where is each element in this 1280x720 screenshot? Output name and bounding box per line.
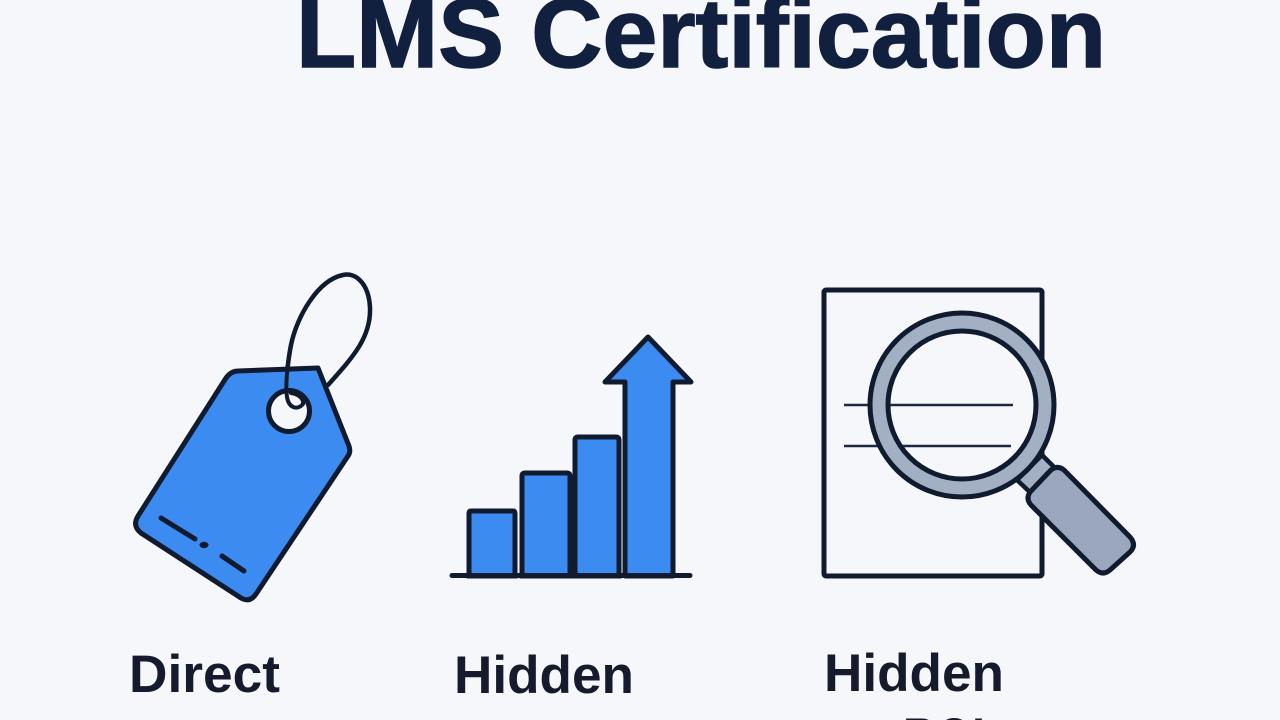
label: hidden: Hidden (454, 646, 634, 705)
tag body (136, 368, 350, 600)
bar 1 (469, 511, 515, 576)
growth arrow (605, 337, 691, 576)
tag string front (286, 345, 303, 408)
bar 2 (522, 473, 570, 576)
magnifier handle (1028, 467, 1134, 573)
tag hole (268, 390, 310, 432)
tag string back loop (286, 275, 370, 385)
icon: price tag (136, 275, 370, 600)
magnifier neck (1017, 455, 1058, 496)
magnifier ring (879, 322, 1045, 488)
bar 3 (575, 437, 619, 576)
document text lines (844, 405, 1013, 446)
label: direct: Direct (129, 645, 280, 704)
icon: document with magnifying glass (824, 290, 1134, 576)
icon: growth bar chart (452, 337, 691, 576)
label: hidden (third column): Hidden (824, 644, 1004, 703)
document (824, 290, 1042, 576)
tag stitch marks (161, 518, 244, 571)
chart baseline (452, 573, 690, 578)
